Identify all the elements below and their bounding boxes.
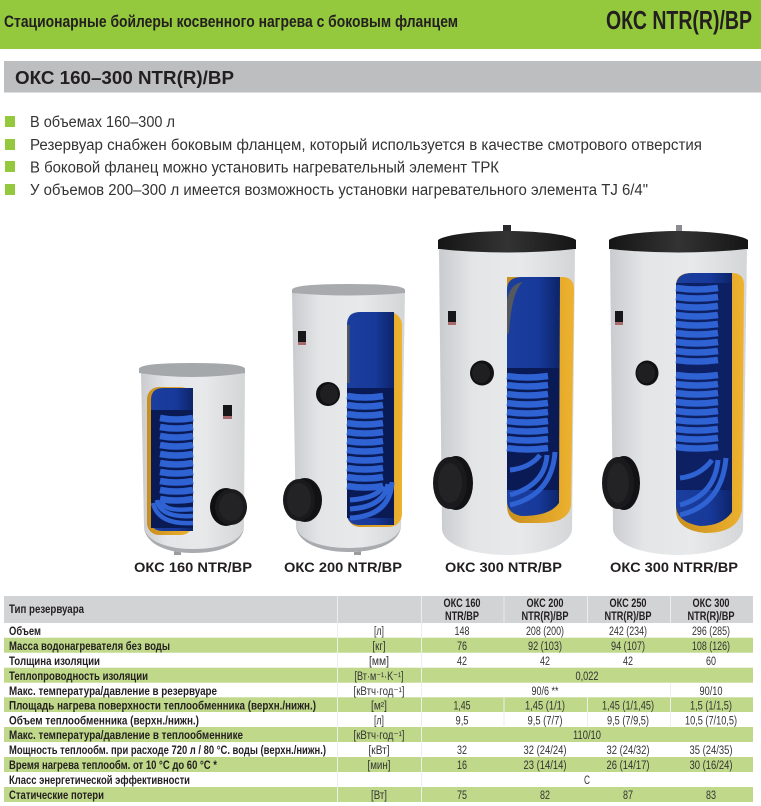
row: exchanger area: 1,5 (1/1,5) xyxy=(690,700,732,712)
row: tank temperature and pressure: Макс. температура/давление в резервуаре xyxy=(9,686,217,698)
row: mass: 108 (126) xyxy=(692,641,730,653)
row: exchanger area: 1,45 (1/1) xyxy=(525,700,565,712)
row: exchanger power: 32 xyxy=(457,745,467,757)
row: static losses: 83 xyxy=(706,790,716,802)
row: mass: 76 xyxy=(457,641,467,653)
row: energy class: C xyxy=(584,775,590,787)
row: heating time xyxy=(9,760,733,772)
row: tank temperature and pressure: 90/10 xyxy=(700,686,722,698)
row: exchanger temperature and pressure: [кВтч·год⁻¹] xyxy=(354,730,404,742)
table header row: Тип резервуара xyxy=(9,604,85,616)
row: exchanger volume: 9,5 (7/9,5) xyxy=(607,716,649,728)
row: exchanger area: Площадь нагрева поверхности теплообменника (верхн./нижн.) xyxy=(9,700,316,712)
row: static losses: 82 xyxy=(540,790,550,802)
row: insulation thickness: 42 xyxy=(540,656,550,668)
row: insulation conductivity: 0,022 xyxy=(576,671,598,683)
row: static losses xyxy=(9,790,716,802)
section heading bar xyxy=(4,61,761,92)
row: exchanger temperature and pressure: Макс. температура/давление в теплообменнике xyxy=(9,730,243,742)
row: volume: 296 (285) xyxy=(692,626,730,638)
bullet 1: В объемах 160–300 л xyxy=(30,114,175,131)
row: exchanger power: 32 (24/24) xyxy=(524,745,567,757)
row: static losses: [Вт] xyxy=(371,790,387,802)
table header row: ОКС 200 xyxy=(526,598,564,610)
row: heating time: 26 (14/17) xyxy=(606,760,650,772)
row: heating time: 16 xyxy=(457,760,467,772)
table header row: ОКС 160 xyxy=(444,598,480,610)
feature bullet list xyxy=(5,114,702,199)
row: static losses: Статические потери xyxy=(9,790,104,802)
row: mass: Масса водонагревателя без воды xyxy=(9,641,170,653)
row: volume: 242 (234) xyxy=(609,626,647,638)
bullet 3: В боковой фланец можно установить нагревательный элемент ТРК xyxy=(30,160,499,176)
row: tank temperature and pressure: 90/6 ** xyxy=(532,686,559,698)
row: exchanger area: 1,45 (1/1,45) xyxy=(602,700,654,712)
boiler: OKC 300 NTRR xyxy=(602,225,748,555)
product label: OKC 300 NTRR: ОКС 300 NTRR/BP xyxy=(610,559,738,575)
table header row: NTR(R)/BP xyxy=(688,611,735,623)
row: insulation thickness xyxy=(9,656,716,668)
row: insulation conductivity xyxy=(9,671,598,683)
row: exchanger power: Мощность теплообм. при расходе 720 л / 80 °C. воды (верхн./нижн.) xyxy=(9,745,326,757)
table header row: NTR/BP xyxy=(445,611,479,623)
row: insulation conductivity: [Вт·м⁻¹·K⁻¹] xyxy=(354,671,404,683)
row: exchanger volume: Объем теплообменника (верхн./нижн.) xyxy=(9,716,199,728)
product label: OKC 160: ОКС 160 NTR/BP xyxy=(134,559,252,575)
product label: OKC 200: ОКС 200 NTR/BP xyxy=(284,559,402,575)
table header row: ОКС 300 xyxy=(692,598,730,610)
row: energy class: Класс энергетической эффективности xyxy=(9,775,190,787)
row: volume: 208 (200) xyxy=(526,626,564,638)
header band xyxy=(0,0,761,49)
boiler: OKC 200 xyxy=(283,284,405,555)
row: tank temperature and pressure: [кВтч·год⁻¹] xyxy=(354,686,404,698)
row: exchanger volume: 10,5 (7/10,5) xyxy=(685,716,737,728)
row: exchanger power: 32 (24/32) xyxy=(606,745,650,757)
row: volume: Объем xyxy=(9,626,41,638)
row: insulation thickness: 42 xyxy=(623,656,633,668)
row: exchanger area: 1,45 xyxy=(454,700,470,712)
row: volume: [л] xyxy=(374,626,384,638)
row: insulation thickness: [мм] xyxy=(369,656,389,668)
table header row: NTR(R)/BP xyxy=(522,611,569,623)
row: mass xyxy=(9,641,730,653)
row: mass: 92 (103) xyxy=(528,641,562,653)
row: mass: 94 (107) xyxy=(611,641,645,653)
row: insulation thickness: 60 xyxy=(706,656,716,668)
bullet 4: У объемов 200–300 л имеется возможность установки нагревательного элемента TJ 6/4" xyxy=(30,182,648,199)
row: exchanger volume: [л] xyxy=(374,716,384,728)
row: exchanger power: [кВт] xyxy=(368,745,390,757)
boiler: OKC 300 NTR xyxy=(433,225,576,555)
row: volume xyxy=(9,626,730,638)
row: heating time: 23 (14/14) xyxy=(524,760,567,772)
row: exchanger power xyxy=(9,745,733,757)
row: static losses: 87 xyxy=(623,790,633,802)
row: mass: [кг] xyxy=(372,641,386,653)
table header row: NTR(R)/BP xyxy=(604,611,652,623)
row: static losses: 75 xyxy=(457,790,467,802)
row: exchanger volume xyxy=(9,716,737,728)
row: exchanger temperature and pressure: 110/10 xyxy=(573,730,601,742)
row: heating time: 30 (16/24) xyxy=(690,760,733,772)
row: insulation thickness: Толщина изоляции xyxy=(9,656,100,668)
section heading text: ОКС 160–300 NTR(R)/BP xyxy=(15,67,234,88)
table header row: ОКС 250 xyxy=(610,598,646,610)
row: exchanger area: [м²] xyxy=(371,700,387,712)
row: exchanger volume: 9,5 xyxy=(456,716,468,728)
row: tank temperature and pressure xyxy=(9,686,722,698)
row: insulation conductivity: Теплопроводность изоляции xyxy=(9,671,148,683)
specification table xyxy=(4,596,753,802)
row: exchanger power: 35 (24/35) xyxy=(690,745,733,757)
header title: Стационарные бойлеры косвенного нагрева с боковым фланцем xyxy=(4,12,458,31)
bullet 2: Резервуар снабжен боковым фланцем, который используется в качестве смотрового отверстия xyxy=(30,137,702,154)
row: volume: 148 xyxy=(454,626,470,638)
table header row xyxy=(4,596,753,623)
boiler: OKC 160 xyxy=(139,363,247,555)
row: exchanger volume: 9,5 (7/7) xyxy=(528,716,563,728)
row: energy class xyxy=(9,775,590,787)
row: heating time: Время нагрева теплообм. от 10 °C до 60 °C * xyxy=(9,760,217,772)
row: exchanger area xyxy=(9,700,732,712)
product label: OKC 300 NTR: ОКС 300 NTR/BP xyxy=(445,559,562,575)
row: insulation thickness: 42 xyxy=(457,656,467,668)
row: heating time: [мин] xyxy=(368,760,390,772)
row: exchanger temperature and pressure xyxy=(9,730,601,742)
